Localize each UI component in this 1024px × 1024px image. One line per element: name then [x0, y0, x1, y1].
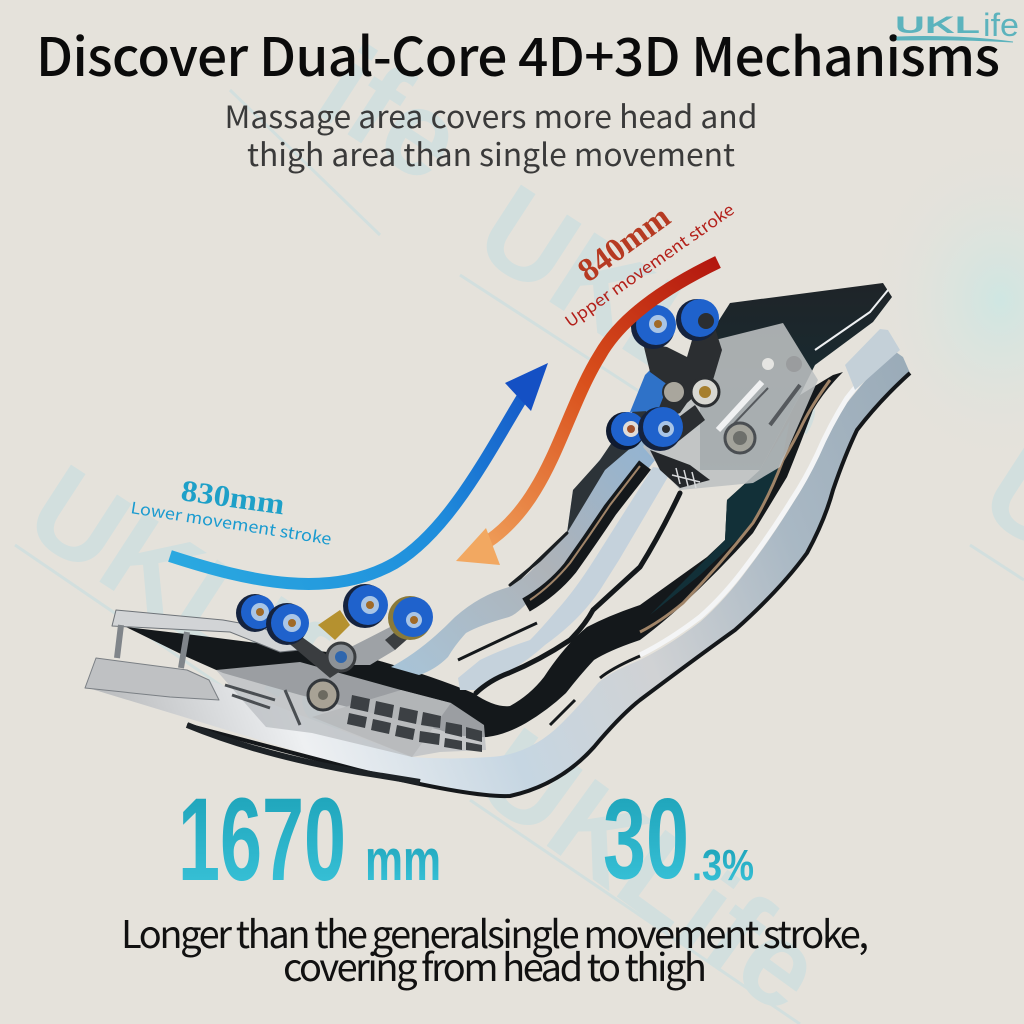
label: 840mm upper stroke: Upper movement stroke [559, 196, 738, 332]
lower left top bar [112, 610, 300, 652]
massage mechanism rails [85, 283, 910, 796]
subtitle: Massage area covers more head and [224, 92, 758, 137]
subtitle: thigh area than single movement [247, 130, 735, 175]
chip details [650, 450, 710, 488]
dark teal tint on the band [650, 420, 790, 615]
bearing [308, 680, 338, 710]
logo [895, 7, 1019, 43]
watermarks: UKLife [6, 439, 403, 762]
label: 830mm lower stroke: Lower movement stroke [129, 494, 334, 550]
arm left [285, 618, 345, 678]
bearings [691, 378, 719, 406]
arm bracket [340, 622, 420, 665]
lower rollers [236, 584, 433, 645]
top dark plate [700, 283, 892, 470]
stat: 1670 mm: mm [365, 828, 441, 893]
left silver rail [391, 400, 660, 675]
slot bar [718, 382, 762, 430]
circuit details [225, 685, 300, 725]
outer silver rail [85, 350, 910, 796]
underside black strip [187, 725, 420, 782]
glass housing [216, 662, 486, 757]
label: 830mm lower stroke: 830mm [179, 474, 287, 521]
lower left pillars [117, 625, 187, 668]
footer text: covering from head to thigh [283, 937, 707, 992]
label: 830mm lower stroke [129, 474, 334, 550]
left black rail [526, 465, 645, 605]
label: 840mm upper stroke: 840mm [572, 199, 677, 289]
watermarks: UKLife [456, 159, 853, 482]
lower rail black strokes [550, 656, 640, 725]
arrow: lower stroke [170, 363, 548, 584]
window grid [347, 695, 482, 752]
footer text [121, 904, 869, 992]
upper mechanism [606, 299, 818, 490]
light rail [458, 467, 672, 690]
stat: 30.3%: .3% [692, 841, 754, 890]
title: Discover Dual-Core 4D+3D Mechanisms [36, 16, 1000, 92]
subtitle [224, 92, 758, 175]
rail inner white edge [640, 345, 893, 655]
logo: ife [983, 7, 1019, 43]
stat: 1670 mm: 1670 [178, 774, 346, 906]
blue backing [630, 350, 670, 412]
gold part [318, 610, 350, 640]
brown stripe [640, 380, 830, 632]
watermarks: ife [296, 19, 486, 208]
logo: UKL [895, 12, 980, 39]
outer rail dark edge [187, 373, 910, 796]
lower arm [655, 405, 705, 448]
dark arm [643, 313, 722, 423]
lower left block [85, 658, 219, 700]
footer text: Longer than the generalsingle movement stroke, [121, 904, 869, 959]
glass housing [643, 323, 818, 490]
arrow: upper stroke [456, 262, 718, 565]
upper rollers [606, 299, 719, 451]
stat: 30.3%: 30 [603, 776, 689, 903]
lower mechanism [216, 584, 486, 757]
black band rail [126, 372, 843, 737]
small silver top piece [845, 329, 900, 390]
